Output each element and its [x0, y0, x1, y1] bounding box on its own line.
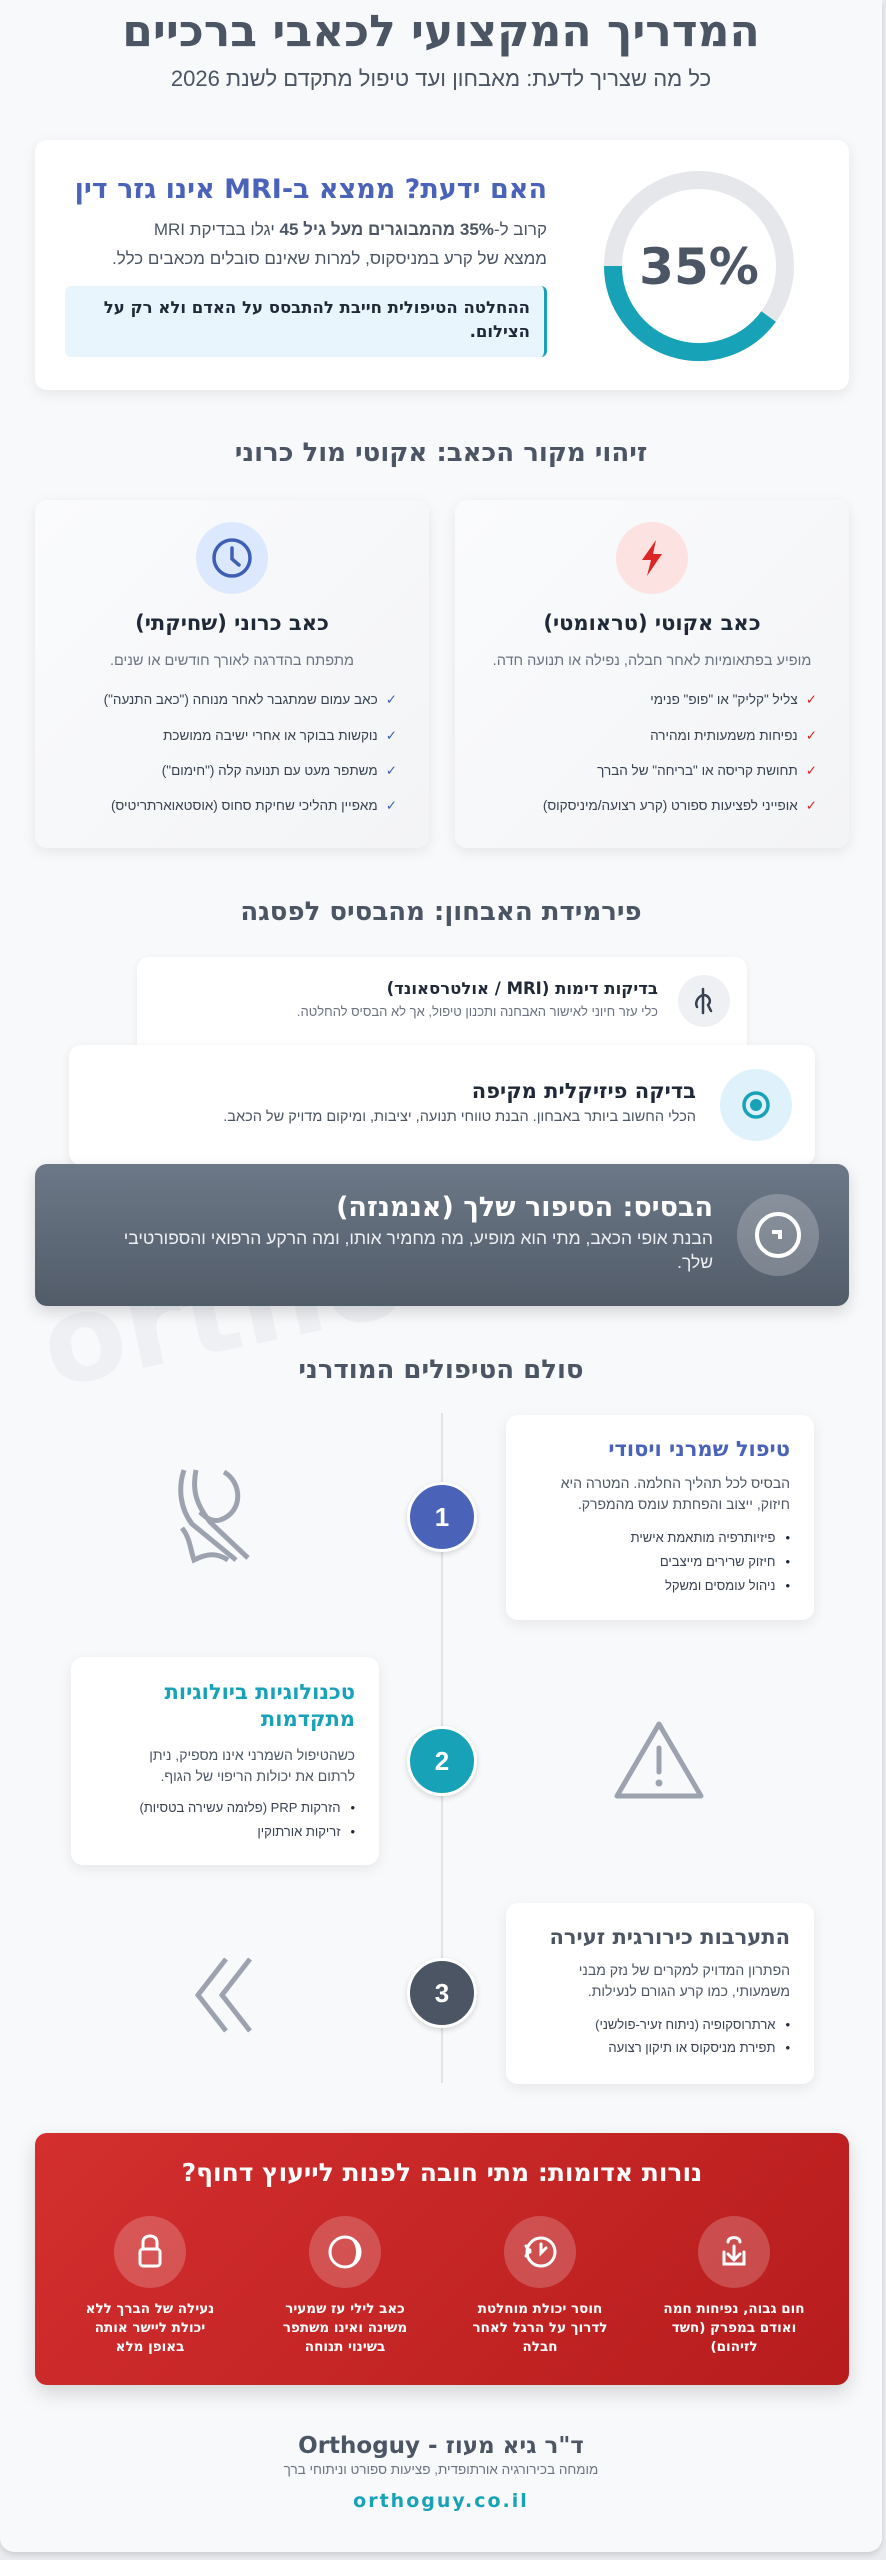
icon: lock [114, 2216, 186, 2288]
step number 3 [407, 1958, 477, 2028]
flag 3: night pain: כאב לילי עז שמעיר משינה ואינו משתפר בשינוי תנוחה [283, 2301, 407, 2355]
flag 2: cannot walk: חוסר יכולת מוחלטת לדרוך על הרגל לאחר חבלה [473, 2301, 607, 2355]
flag 1: fever: חום גבוה, נפיחות חמה ואודם במפרק (חשד לזיהום) [663, 2301, 805, 2355]
flag 3: night pain [283, 2216, 407, 2355]
panel: pyramid base anamnesis [35, 1164, 849, 1306]
heading: diagnosis pyramid: פירמידת האבחון: מהבסיס לפסגה [240, 897, 642, 927]
red flags title: נורות אדומות: מתי חובה לפנות לייעוץ דחוף? [182, 2158, 702, 2187]
panel: acute pain [455, 500, 849, 848]
icon: chevrons [195, 1958, 252, 2032]
title: המדריך המקצועי לכאבי ברכיים [122, 6, 760, 57]
exam title: בדיקה פיזיקלית מקיפה [472, 1079, 696, 1103]
subtitle: כל מה שצריך לדעת: מאבחון ועד טיפול מתקדם לשנת 2026 [171, 66, 711, 91]
panel: red flags [35, 2133, 849, 2385]
icon: lightning [616, 522, 688, 594]
chronic list: ✓כאב עמום שמתגבר לאחר מנוחה ("כאב התנעה") [104, 692, 397, 707]
acute list: ✓נפיחות משמעותית ומהירה [650, 728, 817, 743]
acute desc: מופיע בפתאומיות לאחר חבלה, נפילה או תנועה חדה. [493, 653, 811, 669]
panel: step 3 [506, 1903, 814, 2084]
step number 1: 1 [435, 1502, 449, 1532]
timeline line [441, 1413, 443, 2083]
step1 desc: הבסיס לכל תהליך החלמה. המטרה היא חיזוק, ייצוב והפחתת עומס מהמפרק. [561, 1475, 790, 1512]
step1 list [631, 1530, 790, 1593]
heading: acute vs chronic: זיהוי מקור הכאב: אקוטי מול כרוני [235, 438, 647, 468]
step2 title: טכנולוגיות ביולוגיות מתקדמות [165, 1680, 355, 1731]
step3 list: ארתרוסקופיה (ניתוח זעיר-פולשני) [595, 2017, 775, 2032]
panel: pyramid top imaging [137, 957, 747, 1057]
callout: ההחלטה הטיפולית חייבת להתבסס על האדם ולא רק על הצילום. [104, 298, 530, 341]
chronic list [104, 692, 397, 813]
imaging title: בדיקות דימות (MRI / אולטרסאונד) [387, 979, 658, 998]
step1 title: טיפול שמרני ויסודי [608, 1437, 790, 1461]
watermark: ortho [30, 1203, 417, 1416]
icon: moon [309, 2216, 381, 2288]
chronic title: כאב כרוני (שחיקתי) [135, 611, 329, 635]
step number 2 [407, 1726, 477, 1796]
flag 1: fever [663, 2216, 805, 2355]
panel: pyramid middle physical exam [69, 1045, 815, 1165]
icon: clock x [504, 2216, 576, 2288]
callout [65, 286, 547, 357]
footer name: ד"ר גיא מעוז - Orthoguy [298, 2433, 584, 2459]
step number 2: 2 [435, 1746, 449, 1776]
step1 list: פיזיותרפיה מותאמת אישית [631, 1530, 775, 1545]
footer specialty: מומחה בכירורגיה אורתופדית, פציעות ספורט וניתוחי ברך [284, 2462, 598, 2477]
acute list [543, 692, 817, 813]
icon: warning [614, 1722, 704, 1798]
step3 list [595, 2017, 790, 2055]
chronic desc: מתפתח בהדרגה לאורך חודשים או שנים. [110, 653, 354, 669]
anamnesis desc: הבנת אופי הכאב, מתי הוא מופיע, מה מחמיר אותו, ומה הרקע הרפואי והספורטיבי שלך. [124, 1228, 713, 1272]
anamnesis title: הבסיס: הסיפור שלך (אנמנזה) [336, 1192, 713, 1223]
footer [284, 2433, 598, 2512]
step3 desc: הפתרון המדויק למקרים של נזק מבני משמעותי, כמו קרע הגורם לנעילות. [579, 1962, 790, 1999]
step1 list: ניהול עומסים ומשקל [665, 1578, 775, 1593]
acute list: ✓תחושת קריסה או "בריחה" של הברך [597, 763, 817, 778]
heading: treatment ladder: סולם הטיפולים המודרני [298, 1355, 584, 1385]
exam desc: הכלי החשוב ביותר באבחון. הבנת טווחי תנועה, יציבות, ומיקום מדויק של הכאב. [223, 1109, 696, 1125]
acute list: ✓צליל "קליק" או "פופ" פנימי [650, 692, 817, 707]
flag 2: cannot walk [473, 2216, 607, 2355]
icon: imaging [678, 975, 730, 1027]
icon: history [737, 1194, 819, 1276]
chronic list: ✓מאפיין תהליכי שחיקת סחוס (אוסטאוארתריטיס) [111, 798, 397, 813]
stat paragraph: קרוב ל-35% מהמבוגרים מעל גיל 45 יגלו בבדיקת MRI ממצא של קרע במניסקוס, למרות שאינם סובלים מכאבים כלל. [112, 220, 547, 268]
panel: stat card [35, 140, 849, 390]
acute title: כאב אקוטי (טראומטי) [543, 611, 761, 635]
step number 3: 3 [435, 1978, 449, 2008]
imaging desc: כלי עזר חיוני לאישור האבחנה ותכנון טיפול, אך לא הבסיס להחלטה. [297, 1004, 658, 1019]
footer url: orthoguy.co.il [353, 2490, 529, 2512]
chronic list: ✓נוקשות בבוקר או אחרי ישיבה ממושכת [163, 728, 397, 743]
step2 desc: כשהטיפול השמרני אינו מספיק, ניתן לרתום את יכולות הריפוי של הגוף. [149, 1747, 355, 1784]
panel: step 2 [71, 1657, 379, 1865]
chronic list: ✓משתפר מעט עם תנועה קלה ("חימום") [162, 763, 397, 778]
step3 title: התערבות כירורגית זעירה [549, 1925, 790, 1949]
donut chart 35% [604, 171, 794, 362]
icon: alert download [698, 2216, 770, 2288]
step number 1 [407, 1482, 477, 1552]
panel: chronic pain [35, 500, 429, 848]
step2 list [139, 1800, 354, 1839]
icon: target [720, 1069, 792, 1141]
donut chart 35%: 35% [639, 238, 759, 296]
flag 4: locking: נעילה של הברך ללא יכולת ליישר אותה באופן מלא [86, 2301, 214, 2355]
panel: step 1 [506, 1415, 814, 1620]
flag 4: locking [86, 2216, 214, 2355]
step1 list: חיזוק שרירים מייצבים [660, 1554, 775, 1569]
stat heading: האם ידעת? ממצא ב-MRI אינו גזר דין [75, 174, 547, 205]
step3 list: תפירת מניסקוס או תיקון רצועה [608, 2040, 775, 2055]
step2 list: הזרקות PRP (פלזמה עשירה בטסיות) [139, 1800, 340, 1815]
acute list: ✓אופייני לפציעות ספורט (קרע רצועה/מיניסקוס) [543, 798, 817, 813]
step2 list: זריקות אורתוקין [257, 1824, 340, 1839]
icon: knee [178, 1469, 250, 1564]
icon: clock [196, 522, 268, 594]
